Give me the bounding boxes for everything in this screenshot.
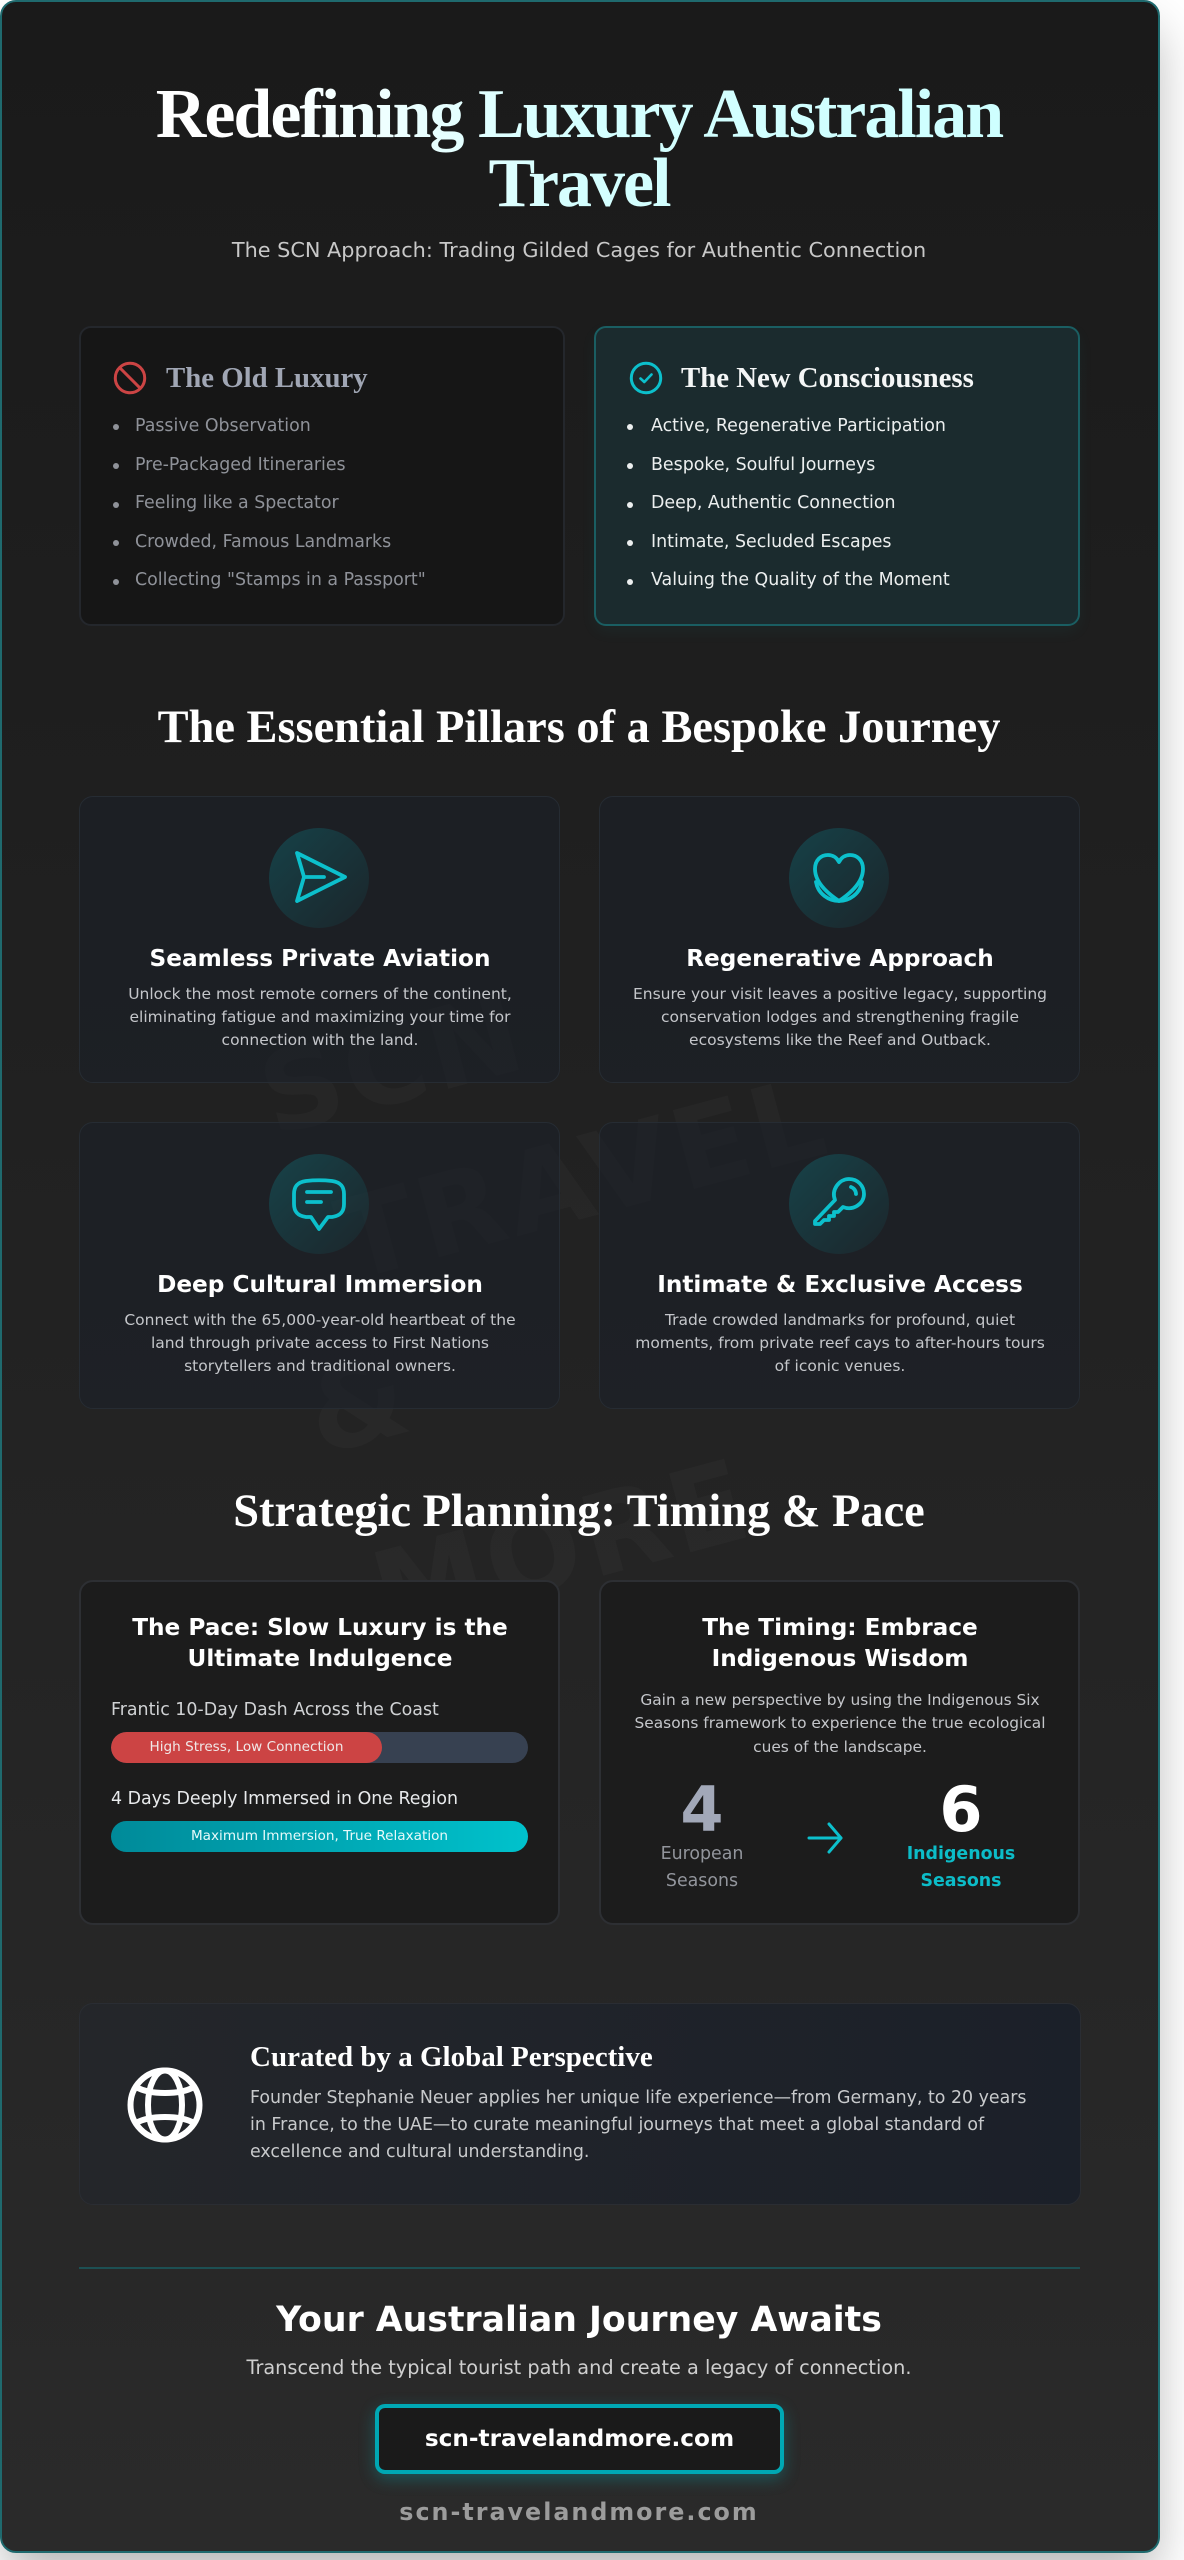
heading: the pace: The Pace: Slow Luxury is the <box>132 1614 508 1641</box>
icon: speech bubble <box>269 1154 369 1254</box>
heading: curated: Curated by a Global Perspective <box>250 2041 653 2073</box>
button: website <box>375 2404 784 2474</box>
bar: maximum immersion: Maximum Immersion, True Relaxation <box>191 1828 448 1844</box>
description <box>635 1311 1045 1375</box>
list: old luxury traits: Collecting "Stamps in a Passport" <box>135 570 426 590</box>
heading: essential pillars: The Essential Pillars of a Bespoke Journey <box>158 702 1000 753</box>
panel: intimate and exclusive access <box>599 1122 1080 1409</box>
heading: Regenerative Approach <box>686 945 994 972</box>
heading: the new consciousness: The New Consciousness <box>681 362 974 394</box>
description: Gain a new perspective by using the Indigenous Six <box>640 1691 1040 1709</box>
watermark: SCN Travel & More: TRAVEL <box>325 1052 842 1307</box>
panel: global perspective <box>79 2003 1081 2205</box>
watermark: SCN Travel & More: & <box>293 1329 425 1481</box>
list: old luxury traits: Crowded, Famous Landmarks <box>135 532 391 552</box>
description: Ensure your visit leaves a positive legacy, supporting <box>633 985 1047 1003</box>
label: Indigenous <box>907 1844 1015 1864</box>
description: of iconic venues. <box>775 1357 905 1375</box>
panel: regenerative approach <box>599 796 1080 1083</box>
description: in France, to the UAE—to curate meaningful journeys that meet a global standard of <box>250 2115 984 2135</box>
tagline: Transcend the typical tourist path and create a legacy of connection. <box>246 2356 911 2379</box>
watermark: SCN Travel & More: SCN <box>247 967 540 1162</box>
list: new consciousness traits: Valuing the Quality of the Moment <box>651 570 950 590</box>
label: frantic dash: Frantic 10-Day Dash Across the Coast <box>111 1700 439 1720</box>
icon: globe <box>128 2068 202 2142</box>
description: cues of the landscape. <box>753 1738 927 1756</box>
heading: the timing <box>702 1614 978 1672</box>
description: connection with the land. <box>222 1031 418 1049</box>
panel: deep cultural immersion <box>79 1122 560 1409</box>
description: Seasons framework to experience the true ecological <box>635 1714 1045 1732</box>
list: new consciousness traits: Active, Regenerative Participation <box>651 416 946 436</box>
arrow <box>808 1822 842 1854</box>
description: ecosystems like the Reef and Outback. <box>689 1031 991 1049</box>
footer url: scn-travelandmore.com <box>399 2498 759 2526</box>
description: excellence and cultural understanding. <box>250 2142 589 2162</box>
list: old luxury traits: Feeling like a Spectator <box>135 493 339 513</box>
heading: the timing: The Timing: Embrace <box>702 1614 978 1641</box>
watermark: SCN Travel & More: MORE <box>359 1435 765 1660</box>
heading: the pace: Ultimate Indulgence <box>188 1645 452 1672</box>
description: Unlock the most remote corners of the continent, <box>128 985 512 1003</box>
list: new consciousness traits: Intimate, Secluded Escapes <box>651 532 892 552</box>
bar fill <box>111 1732 382 1763</box>
description <box>124 1311 516 1375</box>
bar: maximum immersion <box>111 1821 528 1852</box>
list: old luxury traits: Pre-Packaged Itineraries <box>135 455 346 475</box>
description <box>635 1691 1045 1756</box>
list: new consciousness traits: Deep, Authentic Connection <box>651 493 896 513</box>
panel: the pace <box>79 1580 560 1925</box>
title: Redefining Luxury Australian <box>156 76 1002 153</box>
title: Travel <box>488 145 670 222</box>
description: conservation lodges and strengthening fragile <box>661 1008 1019 1026</box>
heading: strategic planning: Strategic Planning: Timing & Pace <box>233 1486 925 1537</box>
description <box>128 985 512 1049</box>
stat: indigenous seasons <box>907 1773 1015 1891</box>
label: Seasons <box>920 1871 1002 1891</box>
icon: key <box>789 1154 889 1254</box>
list: new consciousness traits: Bespoke, Soulful Journeys <box>651 455 875 475</box>
number 4: 4 <box>680 1773 724 1846</box>
panel: the timing <box>599 1580 1080 1925</box>
heading: the pace <box>132 1614 508 1672</box>
description: storytellers and traditional owners. <box>184 1357 456 1375</box>
heading: Intimate & Exclusive Access <box>657 1271 1023 1298</box>
divider <box>79 2267 1080 2269</box>
label: European <box>661 1844 743 1864</box>
number 6: 6 <box>939 1773 983 1846</box>
heading: the old luxury: The Old Luxury <box>166 362 368 394</box>
label <box>661 1844 743 1891</box>
description <box>633 985 1047 1049</box>
icon: paper plane <box>269 828 369 928</box>
heading: Deep Cultural Immersion <box>157 1271 483 1298</box>
list: old luxury traits: Passive Observation <box>135 416 311 436</box>
button: website: scn-travelandmore.com <box>425 2425 734 2452</box>
panel: the new consciousness <box>594 326 1080 626</box>
icon: prohibited <box>114 362 146 394</box>
stat: european seasons <box>661 1773 743 1891</box>
list: old luxury traits <box>113 416 426 590</box>
subtitle: The SCN Approach: Trading Gilded Cages for Authentic Connection <box>232 238 926 262</box>
label <box>907 1844 1015 1891</box>
description: Trade crowded landmarks for profound, quiet <box>665 1311 1015 1329</box>
description: Connect with the 65,000-year-old heartbeat of the <box>124 1311 516 1329</box>
heading: Seamless Private Aviation <box>150 945 490 972</box>
description: eliminating fatigue and maximizing your time for <box>130 1008 510 1026</box>
bar fill: High Stress, Low Connection <box>150 1739 344 1755</box>
description: Founder Stephanie Neuer applies her unique life experience—from Germany, to 20 years <box>250 2088 1026 2108</box>
icon: check circle <box>630 362 662 394</box>
bar: high stress <box>111 1732 528 1763</box>
panel: the old luxury <box>79 326 565 626</box>
heading: the timing: Indigenous Wisdom <box>712 1645 968 1672</box>
title <box>1 80 1157 218</box>
description: moments, from private reef cays to after-hours tours <box>635 1334 1045 1352</box>
description <box>250 2088 1026 2162</box>
panel: seamless private aviation <box>79 796 560 1083</box>
label: Seasons <box>666 1871 738 1891</box>
list: new consciousness traits <box>627 416 950 590</box>
heading: call to action: Your Australian Journey Awaits <box>276 2300 882 2340</box>
description: land through private access to First Nations <box>151 1334 489 1352</box>
icon: heart <box>789 828 889 928</box>
label: deep immersion: 4 Days Deeply Immersed in One Region <box>111 1789 458 1809</box>
